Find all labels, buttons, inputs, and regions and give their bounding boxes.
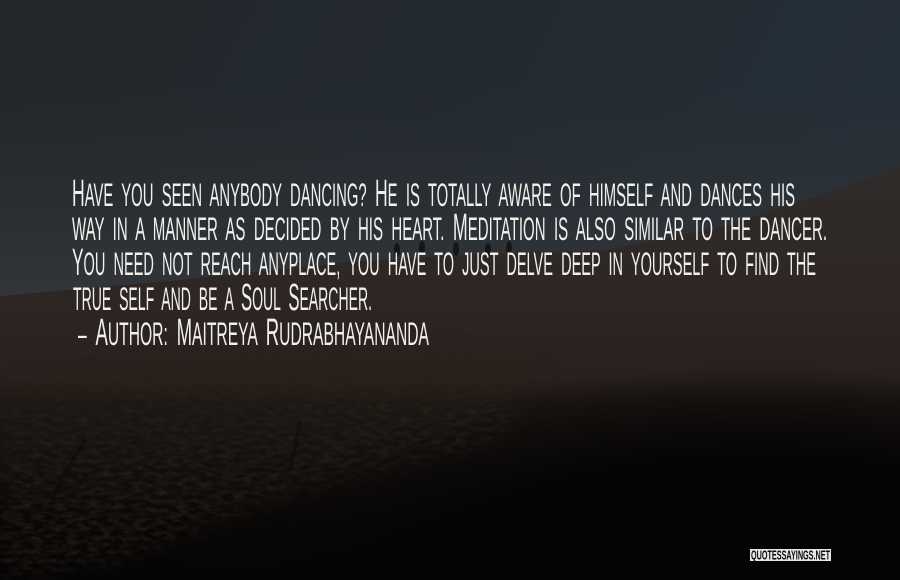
author attribution: – AUTHOR: MAITREYA RUDRABHAYANANDA [78,312,429,354]
vehicle tracks [40,420,300,560]
quote text [72,173,827,354]
darkening over lower right [0,340,900,580]
watermark: QUOTESSAYINGS.NET [751,548,830,562]
textured footprints patch [0,410,506,576]
sand dune with caravan ridge [0,165,900,580]
quote line 4: TRUE SELF AND BE A SOUL SEARCHER. [73,277,372,319]
sky [0,0,900,340]
watermark [750,548,831,562]
caravan silhouettes [394,241,512,257]
